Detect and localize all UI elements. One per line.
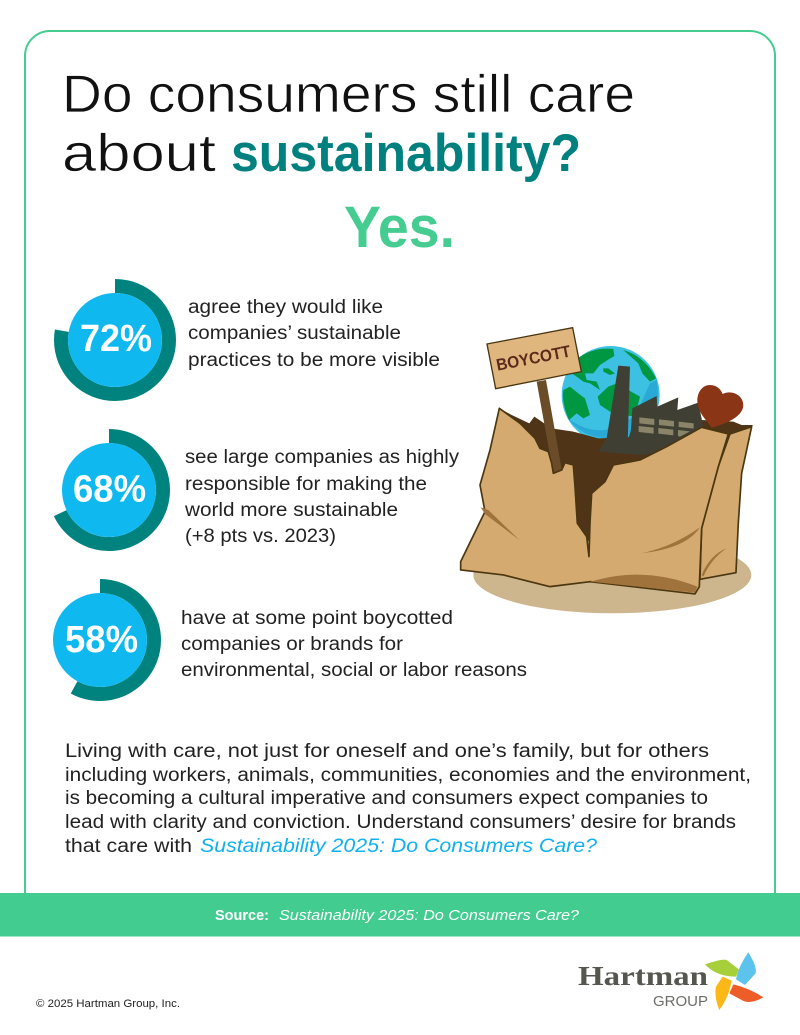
bag front (461, 408, 728, 594)
bag shadow (473, 537, 751, 613)
text: closing paragraph: Sustainability 2025: Do Consumers Care? (200, 836, 597, 857)
title: sustainability? (231, 124, 581, 183)
stat: 58% donut (46, 586, 154, 694)
text: 58% description: companies or brands for (181, 634, 404, 655)
title: Do consumers still care (62, 65, 635, 124)
logo: Hartman Group (578, 952, 763, 1010)
text: 72% description: companies’ sustainable (188, 323, 401, 344)
stat: 58% donut: 58% (65, 619, 138, 661)
stat: 72% donut: 72% (80, 318, 152, 360)
text: 68% description: (+8 pts vs. 2023) (185, 526, 336, 547)
text: 58% description (181, 608, 527, 681)
title: about (62, 124, 216, 183)
sign: boycott (487, 328, 581, 389)
text: closing paragraph: lead with clarity and conviction. Understand consumers’ desire for brands (65, 812, 736, 833)
text: 68% description (184, 447, 460, 547)
heart (697, 385, 743, 428)
text: 58% description: have at some point boycotted (181, 608, 453, 629)
text: 72% description (188, 297, 440, 371)
copyright: © 2025 Hartman Group, Inc. (36, 998, 180, 1010)
title (62, 65, 635, 183)
bag right panel (700, 427, 752, 579)
bag folds (481, 507, 727, 593)
bag interior (499, 408, 753, 543)
logo: Hartman Group: Hartman (578, 961, 708, 991)
text: 72% description: agree they would like (188, 297, 383, 318)
logo: Hartman Group: GROUP (653, 993, 708, 1010)
stat: 68% donut (55, 436, 163, 544)
text: 72% description: practices to be more visible (188, 350, 440, 371)
text: closing paragraph: is becoming a cultural imperative and consumers expect companies to (65, 788, 708, 809)
text: closing paragraph (65, 741, 751, 857)
source band: Source: (215, 908, 269, 924)
illustration: torn paper bag with boycott sign, globe, factory and heart (461, 328, 753, 613)
source band: Sustainability 2025: Do Consumers Care? (279, 908, 580, 924)
logo: pinwheel (705, 952, 763, 1010)
text: 68% description: see large companies as highly (185, 447, 460, 468)
source band (0, 893, 800, 936)
factory (598, 366, 703, 455)
heading: Yes: Yes. (344, 195, 455, 260)
text: closing paragraph: including workers, animals, communities, economies and the environment, (65, 765, 751, 786)
sign: boycott: BOYCOTT (495, 342, 572, 375)
text: 58% description: environmental, social or labor reasons (181, 660, 527, 681)
panel: main frame (25, 31, 775, 895)
text: 68% description: world more sustainable (184, 500, 398, 521)
stat: 72% donut (61, 286, 169, 394)
text: closing paragraph: that care with (65, 836, 192, 857)
globe (562, 346, 660, 444)
sign pole (537, 380, 562, 473)
stat: 68% donut: 68% (73, 468, 146, 510)
text: closing paragraph: Living with care, not just for oneself and one’s family, but for others (65, 741, 709, 762)
text: 68% description: responsible for making the (185, 474, 427, 495)
